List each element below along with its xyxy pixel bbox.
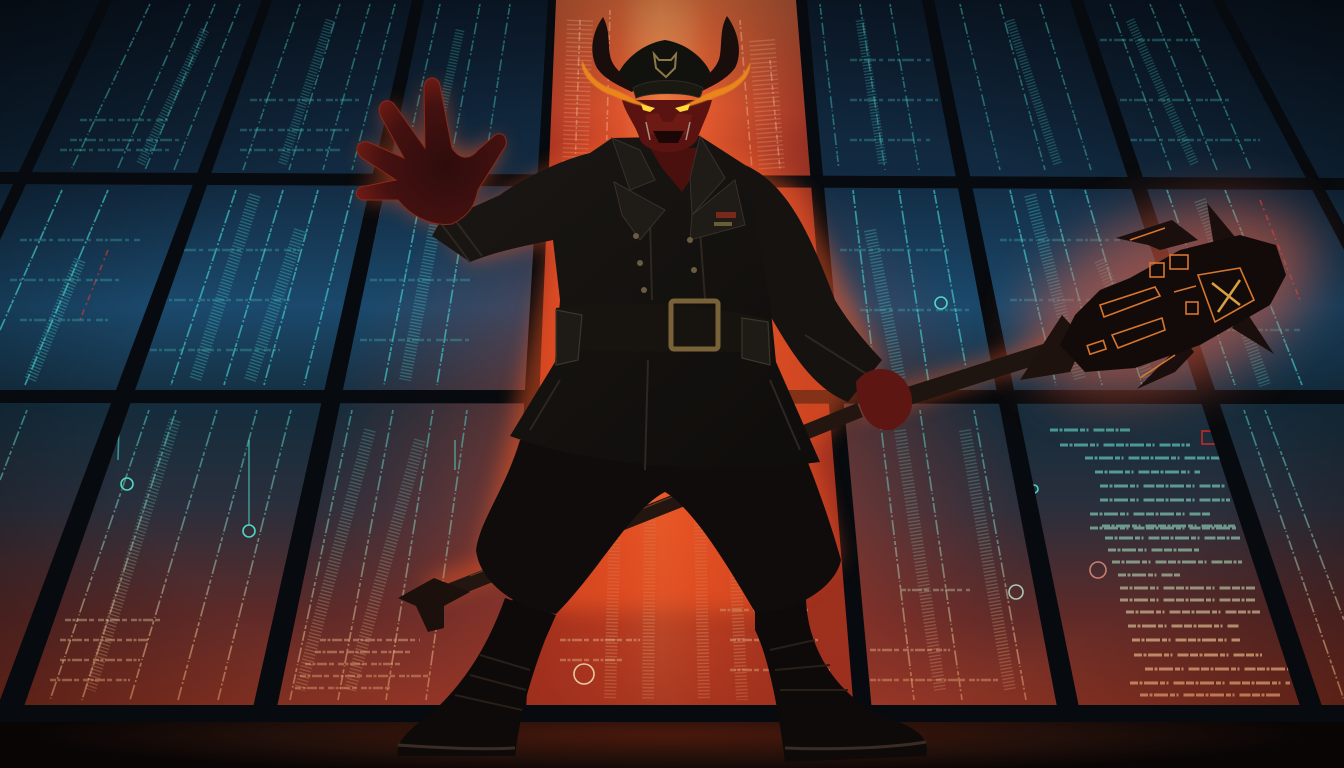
floor	[0, 722, 1344, 768]
cap badge	[654, 54, 676, 77]
spikes and claws	[1116, 203, 1274, 389]
mace shaft upper	[880, 345, 1070, 405]
cap	[619, 40, 710, 92]
code text rows: upper and middle screens	[10, 40, 1300, 350]
right hand gripping shaft	[856, 369, 912, 430]
panel: central glowing column	[512, 0, 862, 710]
neck	[650, 148, 700, 192]
buttons	[633, 233, 697, 293]
circular interface marks	[118, 297, 1226, 684]
figure: demon officer	[356, 78, 927, 762]
mace lower shaft and tail	[398, 410, 860, 632]
code columns: upper row	[71, 4, 1251, 170]
code text rows: lower right screen	[1050, 430, 1290, 695]
face	[622, 100, 712, 152]
code columns: middle row	[0, 190, 1302, 385]
code columns: lower row	[0, 410, 1344, 700]
flames	[582, 60, 750, 108]
mace glow	[999, 165, 1341, 435]
coat details	[440, 216, 868, 470]
belt	[556, 301, 772, 365]
lapels and collar	[612, 136, 745, 240]
mace head	[1020, 203, 1286, 389]
head	[582, 16, 750, 152]
horns	[592, 16, 739, 92]
mouth and fangs	[653, 131, 684, 143]
coat	[432, 136, 820, 468]
boots	[398, 596, 927, 762]
medals	[714, 212, 736, 226]
mace circuit markings	[1087, 228, 1254, 378]
right arm sleeve	[745, 165, 882, 402]
glowing eyes	[641, 104, 690, 112]
code text rows: lower left and centre screens	[50, 590, 1000, 688]
raised hand	[356, 78, 506, 224]
trousers	[476, 440, 841, 614]
figure glow	[362, 86, 1065, 610]
